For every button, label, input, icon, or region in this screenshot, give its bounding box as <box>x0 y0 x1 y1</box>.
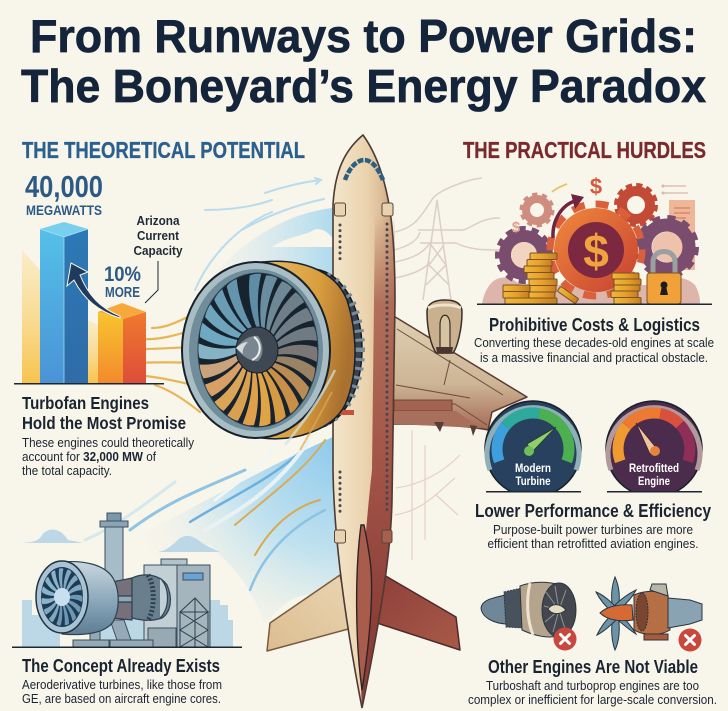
label: 10% more <box>104 263 141 301</box>
label: Arizona current capacity: Current <box>137 229 180 243</box>
bar: Arizona capacity <box>98 303 146 383</box>
fuselage <box>333 135 395 708</box>
padlock <box>647 252 681 304</box>
plane wing <box>392 315 527 436</box>
text block: turbofan engines: These engines could theoretically <box>22 436 195 450</box>
label: Arizona current capacity: Arizona <box>136 214 180 228</box>
label: 10% more: MORE <box>105 285 140 301</box>
label: 40,000 megawatts: 40,000 <box>25 169 103 204</box>
engine lip <box>182 262 330 438</box>
back hills <box>482 277 700 304</box>
icon: turboshaft engine <box>481 582 576 637</box>
bar: 40,000 MW <box>40 222 88 383</box>
turbofan engine <box>182 261 362 450</box>
text block: prohibitive costs <box>474 315 714 365</box>
illustration: aeroderivative turbine plant <box>12 513 242 648</box>
label: Arizona current capacity: Capacity <box>134 244 183 258</box>
icon: turboprop engine <box>596 577 702 650</box>
text block: prohibitive costs: Converting these decades-old engines at scale <box>474 336 714 350</box>
gauge: modern turbine <box>485 401 581 497</box>
sky and airflow backdrop <box>85 178 345 625</box>
turbine nacelle <box>62 562 118 635</box>
gear: purple right <box>638 218 696 276</box>
faint road lines <box>395 430 460 560</box>
text block: concept exists: GE, are based on aircraft engine cores. <box>22 692 221 706</box>
cockpit windows <box>345 160 383 180</box>
chimney <box>100 513 128 597</box>
arrow <box>67 263 120 318</box>
gauge: modern turbine: Turbine <box>516 474 551 488</box>
dollar signs and arrow <box>512 174 602 238</box>
tail stabilizer left <box>267 575 352 651</box>
turbine fan <box>36 561 88 633</box>
tail stabilizer right <box>374 575 460 650</box>
back glow bars <box>22 250 98 383</box>
gauge: retrofitted engine: Retrofitted <box>629 461 679 475</box>
gear: top right <box>617 186 655 224</box>
engine rear section <box>262 269 362 429</box>
text block: turbofan engines <box>22 393 195 478</box>
gear: pale <box>522 195 552 225</box>
chart baseline <box>14 383 164 384</box>
engine hub <box>236 327 278 373</box>
text block: lower performance <box>475 501 711 551</box>
text block: turbofan engines: account for 32,000 MW of <box>22 450 156 464</box>
icon: x badge left <box>554 628 576 650</box>
illustration: gears, coins and lock <box>477 174 712 305</box>
ground line <box>12 646 242 648</box>
ground line <box>477 304 712 305</box>
engine nacelle <box>262 261 355 439</box>
doors <box>334 203 393 543</box>
supports <box>73 620 153 647</box>
title: The Boneyard’s Energy Paradox <box>21 60 706 112</box>
text block: lower performance: Purpose-built power turbines are more <box>493 523 693 537</box>
gear: purple left <box>498 229 550 281</box>
airplane <box>267 135 527 708</box>
dollar signs and arrow: $ <box>512 219 521 236</box>
turbine core <box>112 575 170 620</box>
label: 10% more: 10% <box>104 263 141 286</box>
icon: x badge right <box>678 628 702 652</box>
title <box>21 10 706 112</box>
bar chart: capacity comparison <box>14 169 183 384</box>
text block: other engines <box>468 657 717 707</box>
gauge: modern turbine: Modern <box>515 461 551 475</box>
building <box>144 559 210 647</box>
yellow exhaust streams <box>130 316 212 412</box>
heading: theoretical potential: THE THEORETICAL POTENTIAL <box>22 137 305 163</box>
text block: turbofan engines: Turbofan Engines <box>22 393 149 413</box>
document <box>662 184 695 270</box>
gauge: retrofitted engine: Engine <box>638 474 670 488</box>
skyline and clouds <box>22 530 233 647</box>
coins <box>503 253 641 304</box>
gear: main: $ <box>583 225 609 277</box>
transmission tower <box>394 178 500 300</box>
text block: other engines: Turboshaft and turboprop engines are too <box>486 679 699 693</box>
text block: other engines: complex or inefficient for large-scale conversion. <box>468 693 717 707</box>
window rows <box>340 224 387 514</box>
text block: prohibitive costs: is a massive financial and practical obstacle. <box>480 351 708 365</box>
label: Arizona current capacity <box>134 214 183 258</box>
label: 40,000 megawatts <box>25 169 103 218</box>
dollar signs and arrow: $ <box>590 174 602 199</box>
text block: concept exists: The Concept Already Exists <box>22 656 220 676</box>
text block: turbofan engines: Hold the Most Promise <box>22 413 186 433</box>
engine fan <box>198 273 318 427</box>
text block: concept exists <box>22 656 222 706</box>
gauge: retrofitted engine <box>606 401 702 497</box>
text block: lower performance: efficient than retrofitted aviation engines. <box>488 537 698 551</box>
gear: main <box>550 204 642 296</box>
title: From Runways to Power Grids: <box>30 10 697 62</box>
label: 40,000 megawatts: MEGAWATTS <box>26 202 102 218</box>
plane wing engine <box>427 300 462 353</box>
text block: concept exists: Aeroderivative turbines, like those from <box>22 678 222 692</box>
text block: turbofan engines: the total capacity. <box>22 464 112 478</box>
